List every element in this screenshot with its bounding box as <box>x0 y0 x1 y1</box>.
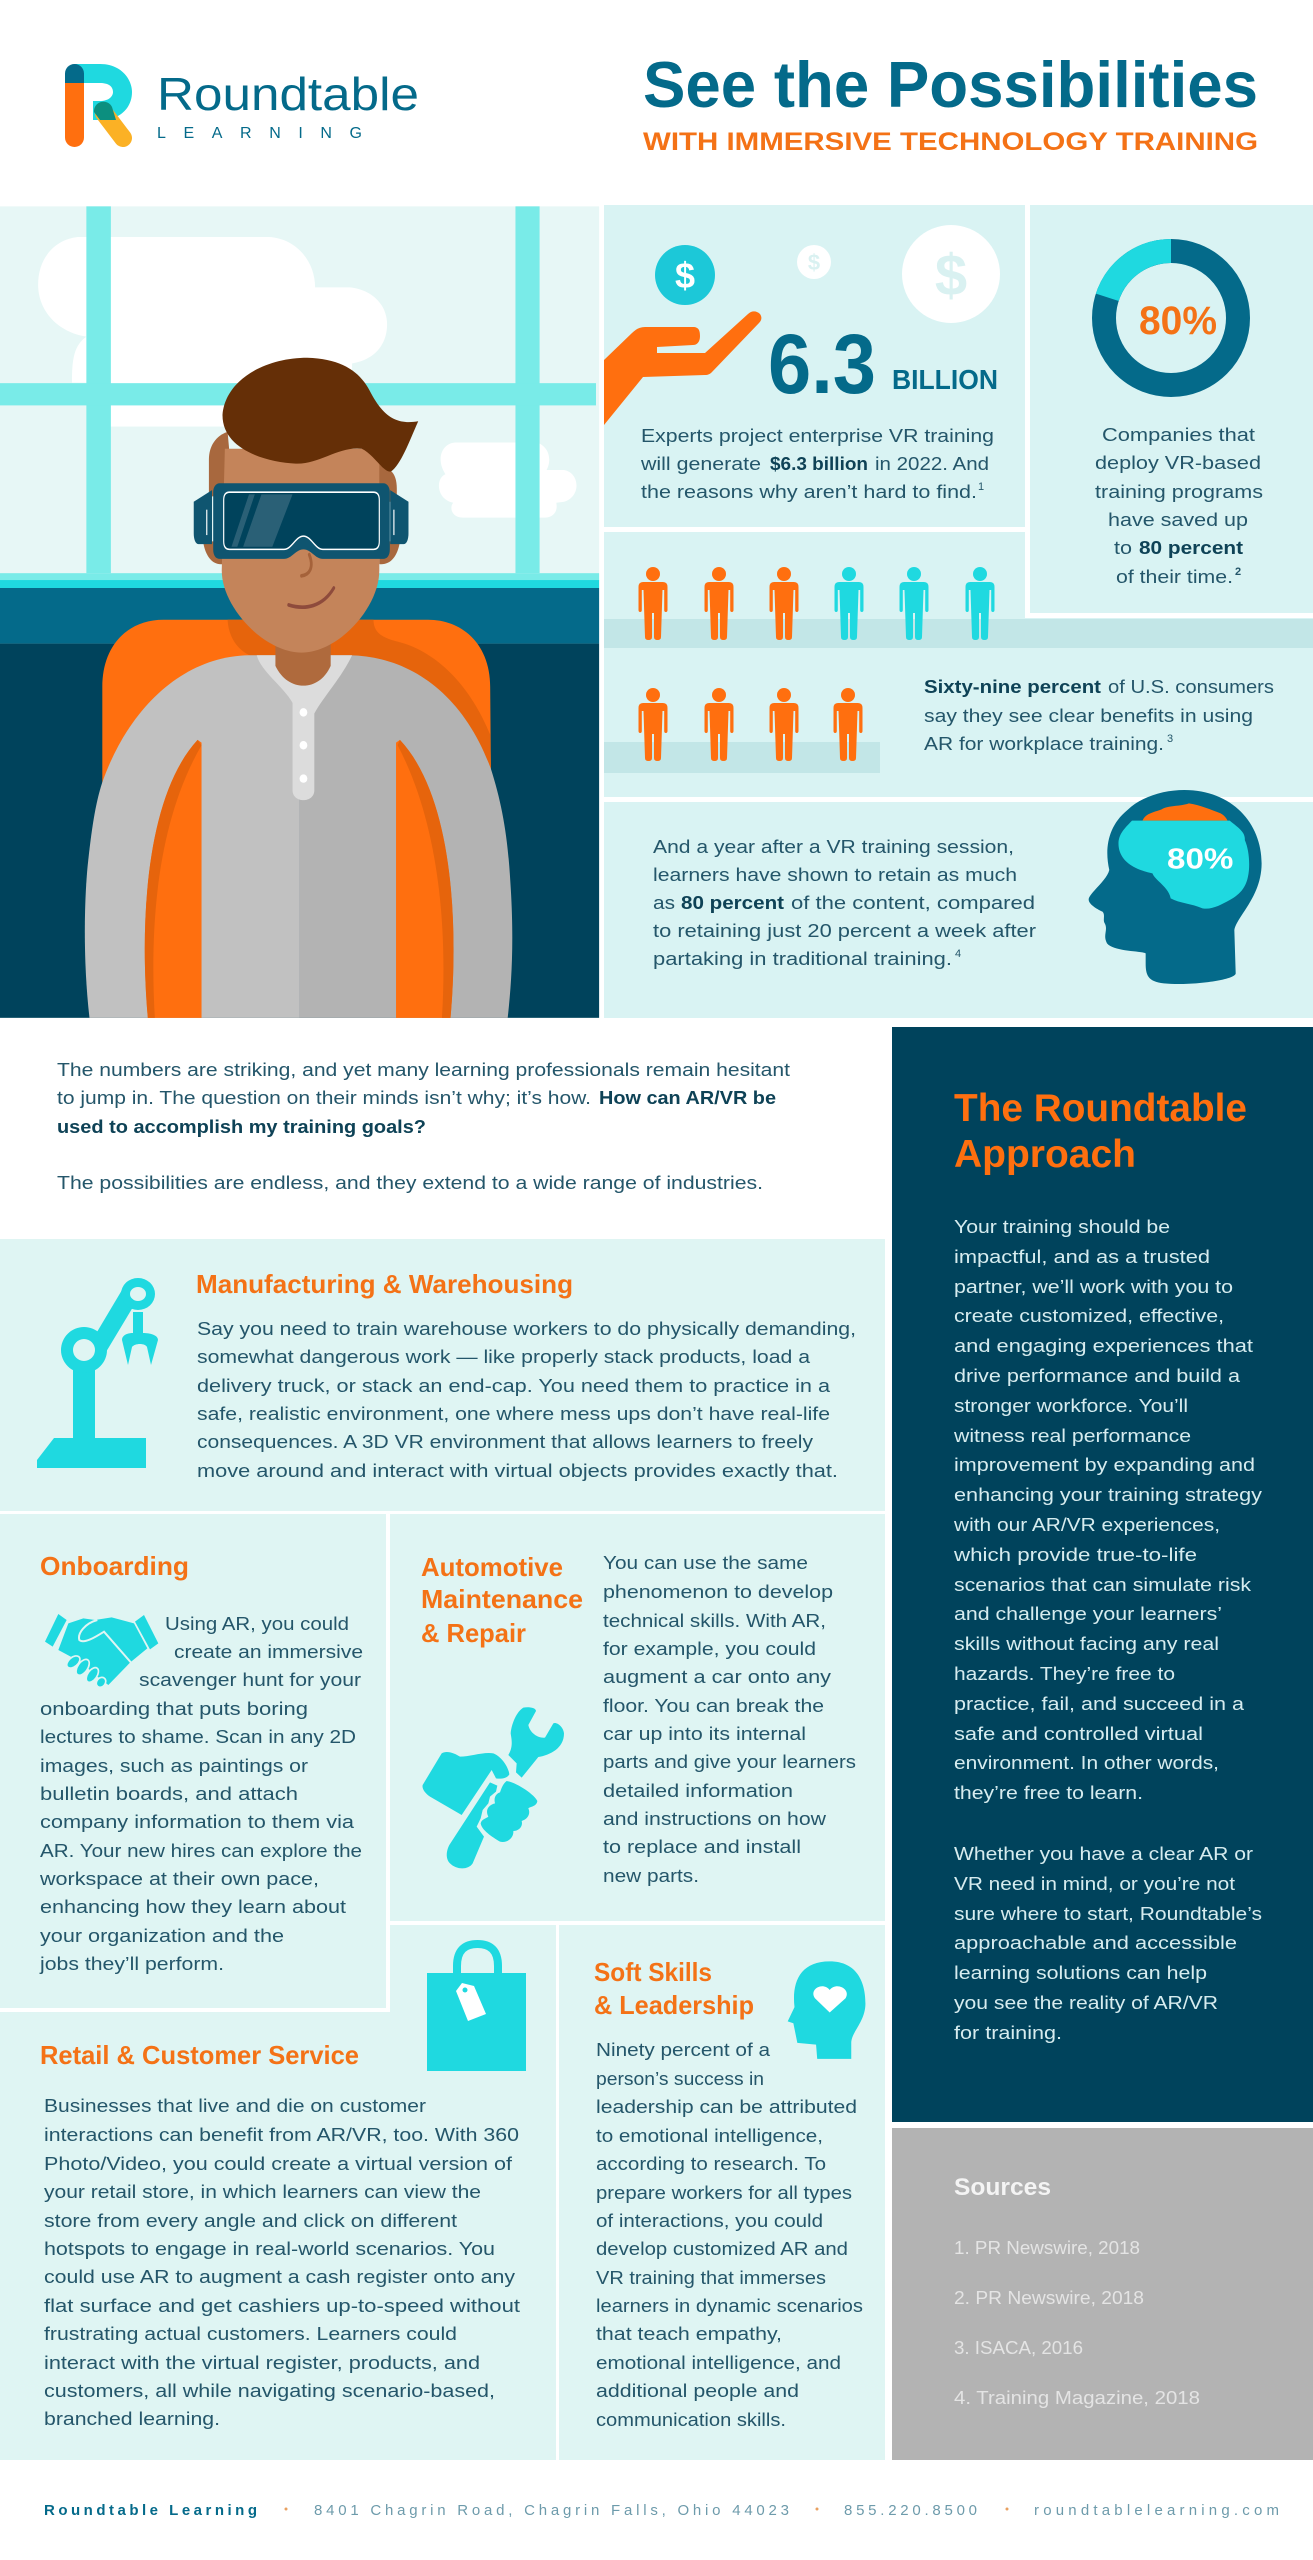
body text: consequences. A 3D VR environment that allows learners to freely <box>197 1431 814 1452</box>
icon: row of four people <box>638 688 862 761</box>
body text: flat surface and get cashiers up-to-speed without <box>44 2295 520 2316</box>
body text: prepare workers for all types <box>596 2182 852 2203</box>
body text paragraph one: scenarios that can simulate risk <box>954 1574 1252 1595</box>
intro text: to jump in. The question on their minds isn’t why; it’s how. <box>57 1087 591 1108</box>
body text: parts and give your learners <box>603 1751 856 1772</box>
body text: branched learning. <box>44 2408 220 2429</box>
stat description: deploy VR-based <box>1095 452 1261 473</box>
stat description: And a year after a VR training session, <box>653 836 1014 857</box>
body text paragraph one: create customized, effective, <box>954 1305 1224 1326</box>
body text: Say you need to train warehouse workers to do physically demanding, <box>197 1318 856 1339</box>
body text: floor. You can break the <box>603 1695 824 1716</box>
sweater <box>85 655 512 1018</box>
intro text: How can AR/VR be <box>599 1087 776 1108</box>
icon: head with brain: 80% <box>1167 843 1233 875</box>
body text paragraph one: partner, we’ll work with you to <box>954 1276 1233 1297</box>
body text: Ninety percent of a <box>596 2039 771 2060</box>
icon: large white dollar coin: $ <box>935 243 967 308</box>
body text: safe, realistic environment, one where mess ups don’t have real-life <box>197 1403 830 1424</box>
heading: Automotive <box>421 1552 563 1582</box>
body text paragraph two: sure where to start, Roundtable’s <box>954 1903 1262 1924</box>
stat description: Companies that <box>1102 424 1255 445</box>
body text: VR training that immerses <box>596 2267 826 2288</box>
stat description: 80 percent <box>1139 537 1243 558</box>
logo <box>65 64 419 147</box>
stat description: training programs <box>1095 481 1263 502</box>
heading: Manufacturing & Warehousing <box>196 1269 573 1299</box>
panel: 80 percent time saved <box>1030 205 1313 613</box>
face <box>222 449 379 653</box>
heading: & Leadership <box>594 1990 754 2020</box>
body text <box>39 1613 363 1974</box>
window sill and wall <box>0 573 599 1018</box>
heading <box>594 1957 754 2020</box>
heading: Sources <box>954 2174 1051 2201</box>
stat description: have saved up <box>1108 509 1248 530</box>
stat description: 3 <box>1167 733 1173 745</box>
body text paragraph two: you see the reality of AR/VR <box>954 1992 1218 2013</box>
stat description: the reasons why aren’t hard to find. <box>641 481 977 502</box>
stat description: partaking in traditional training. <box>653 948 952 969</box>
body text paragraph one: practice, fail, and succeed in a <box>954 1693 1245 1714</box>
body text: new parts. <box>603 1865 699 1886</box>
body text paragraph one: and challenge your learners’ <box>954 1603 1222 1624</box>
panel: retail and customer service <box>0 1925 556 2460</box>
body text: Photo/Video, you could create a virtual version of <box>44 2153 513 2174</box>
body text: bulletin boards, and attach <box>40 1783 298 1804</box>
stat description: 1 <box>978 481 984 493</box>
body text: frustrating actual customers. Learners could <box>44 2323 457 2344</box>
icon: orange open hand <box>604 311 761 425</box>
heading: Approach <box>954 1133 1136 1176</box>
heading: Maintenance <box>421 1584 583 1614</box>
donut value: 80% <box>1139 299 1217 343</box>
body text paragraph one: improvement by expanding and <box>954 1454 1255 1475</box>
VR headset <box>194 483 408 559</box>
heading <box>421 1552 583 1648</box>
body text: move around and interact with virtual objects provides exactly that. <box>197 1460 838 1481</box>
body text: Using AR, you could <box>165 1613 349 1634</box>
stat description: will generate <box>640 453 761 474</box>
back of head and ears <box>203 432 400 564</box>
body text: scavenger hunt for your <box>139 1669 361 1690</box>
body text: AR. Your new hires can explore the <box>40 1840 362 1861</box>
logo tagline: LEARNING <box>157 125 362 142</box>
icon: shopping bag <box>427 1944 526 2071</box>
body text: additional people and <box>596 2380 799 2401</box>
stat description: as <box>653 892 675 913</box>
icon: robot arm <box>37 1278 158 1468</box>
stat description: 2 <box>1235 566 1241 578</box>
body text: and instructions on how <box>603 1808 827 1829</box>
icon: large white dollar coin <box>902 225 1000 323</box>
body text paragraph two: for training. <box>954 2022 1062 2043</box>
body text paragraph one: drive performance and build a <box>954 1365 1241 1386</box>
body text <box>596 2039 863 2430</box>
logo wordmark: Roundtable <box>157 68 419 120</box>
body text: communication skills. <box>596 2409 786 2430</box>
body text: leadership can be attributed <box>596 2096 857 2117</box>
body text: car up into its internal <box>603 1723 806 1744</box>
body text paragraph two: approachable and accessible <box>954 1932 1237 1953</box>
stat description: to retaining just 20 percent a week after <box>653 920 1036 941</box>
stat description <box>1095 424 1263 587</box>
panel: people stat <box>604 532 1313 797</box>
body text paragraph one: skills without facing any real <box>954 1633 1219 1654</box>
stat description: of the content, compared <box>791 892 1035 913</box>
body text: create an immersive <box>174 1641 363 1662</box>
body text paragraph two <box>954 1843 1262 2043</box>
body text paragraph one: enhancing your training strategy <box>954 1484 1263 1505</box>
stat description: of U.S. consumers <box>1108 676 1274 697</box>
body text <box>44 2095 520 2429</box>
seat <box>102 620 491 788</box>
body text: develop customized AR and <box>596 2238 848 2259</box>
stat description: AR for workplace training. <box>924 733 1164 754</box>
footer: Roundtable Learning <box>44 2502 257 2519</box>
panel: manufacturing and warehousing <box>0 1239 885 1511</box>
body text: person’s success in <box>596 2068 764 2089</box>
body text paragraph one: with our AR/VR experiences, <box>953 1514 1220 1535</box>
panel: the Roundtable approach <box>892 1027 1313 2122</box>
body text paragraph one: stronger workforce. You’ll <box>954 1395 1188 1416</box>
stat description: to <box>1114 537 1132 558</box>
panel: 6.3 billion stat <box>604 205 1025 527</box>
body text <box>197 1318 856 1481</box>
intro text <box>57 1059 790 1193</box>
panel: soft skills and leadership <box>559 1925 885 2460</box>
body text: store from every angle and click on different <box>44 2210 457 2231</box>
heading: & Repair <box>421 1618 526 1648</box>
icon: head with brain <box>1089 790 1262 984</box>
body text: could use AR to augment a cash register onto any <box>44 2266 516 2287</box>
body text: that teach empathy, <box>596 2323 782 2344</box>
body text: augment a car onto any <box>603 1666 832 1687</box>
stat description <box>653 836 1036 969</box>
body text paragraph two: Whether you have a clear AR or <box>954 1843 1253 1864</box>
icon: handshake <box>45 1614 158 1689</box>
icon: teal dollar coin: $ <box>675 255 695 296</box>
source list: 1. PR Newswire, 2018 <box>954 2237 1140 2258</box>
body text: to replace and install <box>603 1836 801 1857</box>
source list: 3. ISACA, 2016 <box>954 2337 1083 2358</box>
body text: onboarding that puts boring <box>40 1698 308 1719</box>
body text paragraph two: VR need in mind, or you’re not <box>954 1873 1235 1894</box>
icon: row of six people <box>638 567 994 640</box>
heading: Onboarding <box>40 1551 189 1581</box>
body text paragraph one: witness real performance <box>953 1425 1191 1446</box>
panel: hero illustration <box>0 206 599 1018</box>
hair <box>223 358 418 472</box>
icon: teal dollar coin <box>655 245 715 305</box>
intro text: The possibilities are endless, and they extend to a wide range of industries. <box>57 1172 763 1193</box>
clouds <box>38 237 577 518</box>
neck <box>275 623 331 686</box>
body text: interactions can benefit from AR/VR, too. With 360 <box>44 2124 519 2145</box>
stat description <box>640 425 994 502</box>
source list: 4. Training Magazine, 2018 <box>954 2387 1200 2408</box>
body text: jobs they’ll perform. <box>39 1953 224 1974</box>
stat description: 80 percent <box>681 892 784 913</box>
footer <box>44 2502 1279 2519</box>
body text: your retail store, in which learners can view the <box>44 2181 481 2202</box>
source list: 2. PR Newswire, 2018 <box>954 2287 1144 2308</box>
panel: onboarding <box>0 1514 386 2008</box>
subtitle: WITH IMMERSIVE TECHNOLOGY TRAINING <box>643 128 1258 156</box>
stat number: 6.3 <box>768 317 876 411</box>
sweater arm gaps <box>145 740 454 1018</box>
body text: of interactions, you could <box>596 2210 823 2231</box>
body text: interact with the virtual register, products, and <box>44 2352 480 2373</box>
body text paragraph two: learning solutions can help <box>954 1962 1207 1983</box>
heading: Soft Skills <box>594 1957 712 1987</box>
stat description: of their time. <box>1116 566 1233 587</box>
icon: hand holding wrench <box>422 1707 564 1868</box>
body text: images, such as paintings or <box>40 1755 308 1776</box>
body text: enhancing how they learn about <box>40 1896 346 1917</box>
intro text: used to accomplish my training goals? <box>57 1116 426 1137</box>
icon: head with heart <box>788 1961 865 2059</box>
body text: lectures to shame. Scan in any 2D <box>40 1726 356 1747</box>
body text paragraph one: environment. In other words, <box>954 1752 1219 1773</box>
body text: phenomenon to develop <box>603 1581 833 1602</box>
footer: 855.220.8500 <box>844 2502 977 2519</box>
body text paragraph one: safe and controlled virtual <box>954 1723 1203 1744</box>
panel: sources <box>892 2128 1313 2460</box>
heading <box>954 1087 1247 1176</box>
nose and smile <box>289 555 334 607</box>
heading: Retail & Customer Service <box>40 2040 359 2070</box>
source list <box>954 2237 1200 2408</box>
icon: small white dollar coin: $ <box>808 250 820 275</box>
window frame <box>0 206 596 573</box>
body text: for example, you could <box>603 1638 816 1659</box>
body text paragraph one <box>953 1216 1263 1803</box>
body text: Businesses that live and die on customer <box>44 2095 426 2116</box>
stat description: say they see clear benefits in using <box>924 705 1253 726</box>
body text: technical skills. With AR, <box>603 1610 826 1631</box>
heading: The Roundtable <box>954 1087 1247 1130</box>
body text paragraph one: which provide true-to-life <box>953 1544 1197 1565</box>
body text paragraph one: hazards. They’re free to <box>954 1663 1175 1684</box>
body text: workspace at their own pace, <box>39 1868 319 1889</box>
collar and placket <box>257 655 352 800</box>
panel: retention stat <box>604 790 1313 1018</box>
body text: hotspots to engage in real-world scenarios. You <box>44 2238 495 2259</box>
stat description: learners have shown to retain as much <box>653 864 1017 885</box>
panel: automotive maintenance and repair <box>390 1514 885 1921</box>
footer: roundtablelearning.com <box>1034 2502 1279 2519</box>
body text: detailed information <box>603 1780 793 1801</box>
body text: to emotional intelligence, <box>596 2125 823 2146</box>
logo mark <box>65 64 132 147</box>
stat description: Sixty-nine percent <box>924 676 1101 697</box>
stat description: in 2022. And <box>875 453 989 474</box>
body text: according to research. To <box>596 2153 826 2174</box>
icon: small white dollar coin <box>797 245 831 279</box>
body text: delivery truck, or stack an end-cap. You need them to practice in a <box>197 1375 831 1396</box>
stat description: $6.3 billion <box>770 453 868 474</box>
body text paragraph one: they’re free to learn. <box>954 1782 1143 1803</box>
body text paragraph one: and engaging experiences that <box>954 1335 1253 1356</box>
stat description <box>924 676 1274 754</box>
ground bands <box>604 619 1313 773</box>
footer: 8401 Chagrin Road, Chagrin Falls, Ohio 44023 <box>314 2502 789 2519</box>
title: See the Possibilities <box>643 48 1258 121</box>
stat unit: BILLION <box>892 364 998 395</box>
stat description: Experts project enterprise VR training <box>641 425 994 446</box>
body text paragraph one: Your training should be <box>954 1216 1170 1237</box>
body text: company information to them via <box>40 1811 355 1832</box>
intro text: The numbers are striking, and yet many learning professionals remain hesitant <box>57 1059 790 1080</box>
stat description: 4 <box>955 948 961 960</box>
body text paragraph one: impactful, and as a trusted <box>954 1246 1210 1267</box>
body text: customers, all while navigating scenario-based, <box>44 2380 495 2401</box>
body text <box>603 1552 856 1886</box>
donut chart <box>1104 251 1238 385</box>
body text: somewhat dangerous work — like properly stack products, load a <box>197 1346 811 1367</box>
body text: emotional intelligence, and <box>596 2352 841 2373</box>
body text: You can use the same <box>603 1552 808 1573</box>
body text: learners in dynamic scenarios <box>596 2295 863 2316</box>
body text: your organization and the <box>40 1925 284 1946</box>
